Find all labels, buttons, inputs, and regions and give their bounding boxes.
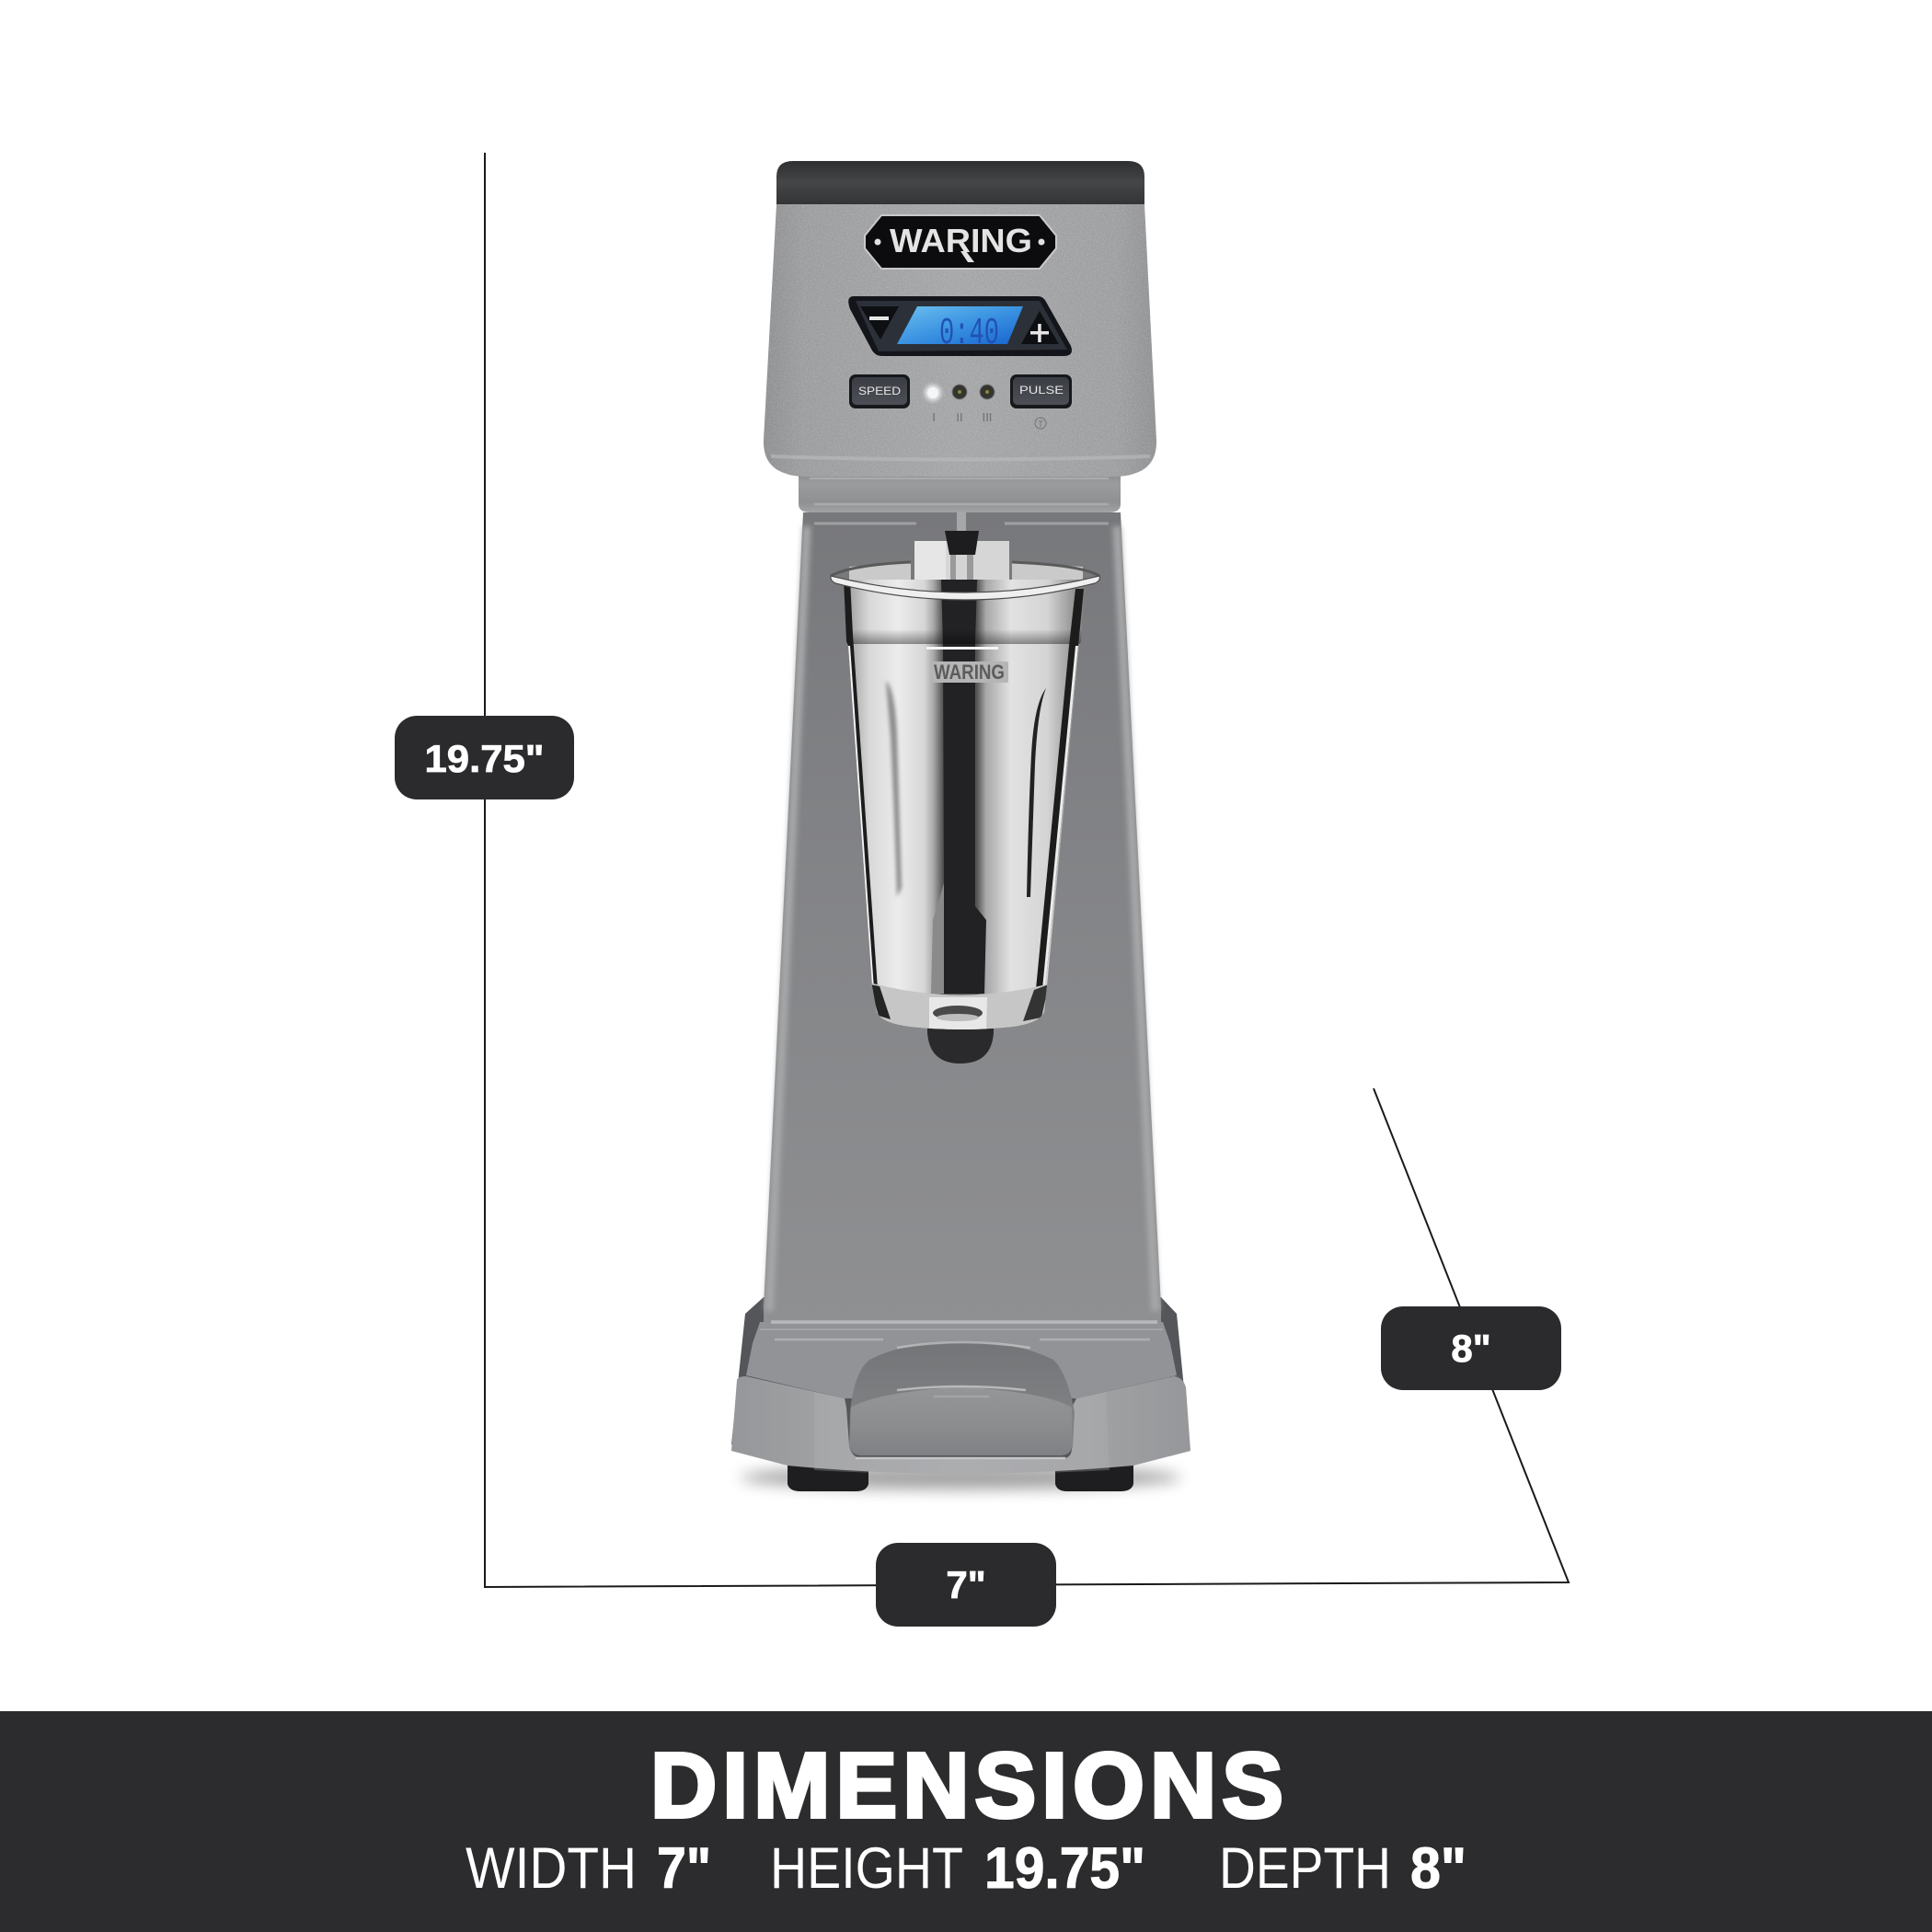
central reflection lower grey [931,883,944,994]
logo plate [865,215,1056,269]
head shell [764,204,1156,477]
dimension badge: height [395,716,574,799]
central reflection [941,580,986,994]
tray recess floor [850,1386,1072,1455]
dimension badge: depth [1381,1306,1561,1390]
right edge shine [1042,646,1078,989]
top cap [776,161,1144,204]
head neck [799,471,1121,512]
cup rim interior [849,562,911,589]
right groove [1027,688,1046,897]
head lower highlight [771,456,1150,460]
dimensions summary [466,1836,1466,1901]
base facets [814,1392,1110,1474]
LCD display: 0:40 [939,313,999,355]
dimensions summary: HEIGHT [770,1836,963,1901]
product: milkshake mixer [731,161,1190,1491]
minus button [860,306,899,339]
base front [731,1376,1190,1474]
band shine [926,647,998,650]
speed indicators: III [983,410,992,424]
cup rim back [831,562,1099,576]
head speckle texture [764,204,1156,477]
LCD display [897,306,1023,355]
upper band shading [846,631,1082,644]
cup logo: WARING [934,661,1005,684]
title: DIMENSIONS [650,1734,1283,1837]
floor shadow [740,1466,1181,1489]
speed indicators: I [932,410,936,424]
stainless steel cup [831,562,1099,1035]
neck highlights [810,478,1109,504]
dimension badge: height: 19.75" [425,737,545,780]
spindle and cup bracket [914,512,1009,592]
recess under head highlights [814,523,1109,524]
tray recess back wall [849,1341,1075,1448]
left edge shine [847,646,874,989]
speed indicators [925,385,1046,429]
logo plate: WARING [890,222,1032,259]
dimensions summary: WIDTH [466,1836,637,1901]
speed button: SPEED [858,386,901,397]
bottom band [872,983,1047,1029]
dimensions summary: DEPTH [1219,1836,1391,1901]
right edge dark [1036,589,1084,989]
base rear [731,1297,1190,1463]
body base step [746,1322,1177,1398]
cup rim [831,576,1099,600]
dimensions summary: 7" [657,1836,711,1901]
body edge highlights [769,526,1156,1311]
dimensions summary: 19.75" [984,1836,1145,1901]
body base highlight [760,1322,1163,1340]
dimension badge: width [876,1543,1056,1627]
bottom band [0,1711,1932,1932]
left edge dark [843,580,878,989]
dimension badge: depth: 8" [1451,1327,1491,1370]
pulse button: PULSE [1019,385,1064,397]
dimension lines [485,153,1569,1587]
cup body [844,580,1084,1029]
speed button [849,374,910,408]
speed indicators: II [956,410,963,424]
rubber feet [788,1463,1133,1491]
dimension badge: width: 7" [946,1563,986,1606]
tray highlights [856,1342,1065,1458]
pulse button [1010,374,1072,408]
plus button [1021,311,1059,344]
left groove [886,681,902,897]
mixer body column [764,512,1161,1332]
speed indicators: T [1038,420,1043,429]
dimensions summary: 8" [1410,1836,1466,1901]
control panel [848,296,1072,356]
drive coupling below cup [927,1017,994,1064]
